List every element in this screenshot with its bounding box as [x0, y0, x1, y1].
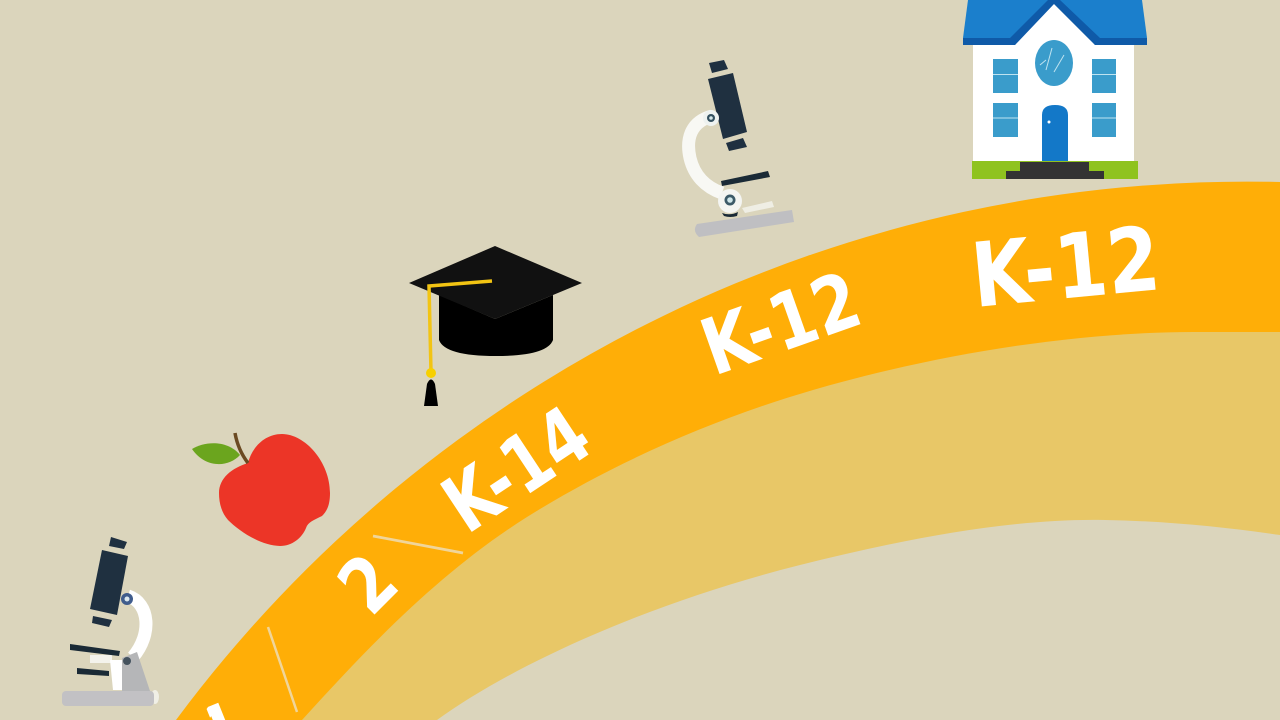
icon: school house — [963, 0, 1147, 179]
label: 2: 2 — [321, 537, 415, 631]
icon: microscope right — [689, 60, 794, 237]
label: K-12 middle: K-12 — [690, 255, 872, 394]
separator line upper — [373, 536, 463, 553]
tan inner arc band — [302, 332, 1280, 720]
icon: microscope left — [62, 537, 159, 706]
separator line lower — [268, 627, 297, 712]
icon: apple — [192, 433, 330, 546]
orange arc band — [176, 182, 1280, 720]
inner background arc — [437, 520, 1280, 720]
icon: graduation cap — [409, 246, 582, 406]
label: K-12 right: K-12 — [967, 206, 1164, 328]
label: K-14: K-14 — [427, 389, 607, 551]
